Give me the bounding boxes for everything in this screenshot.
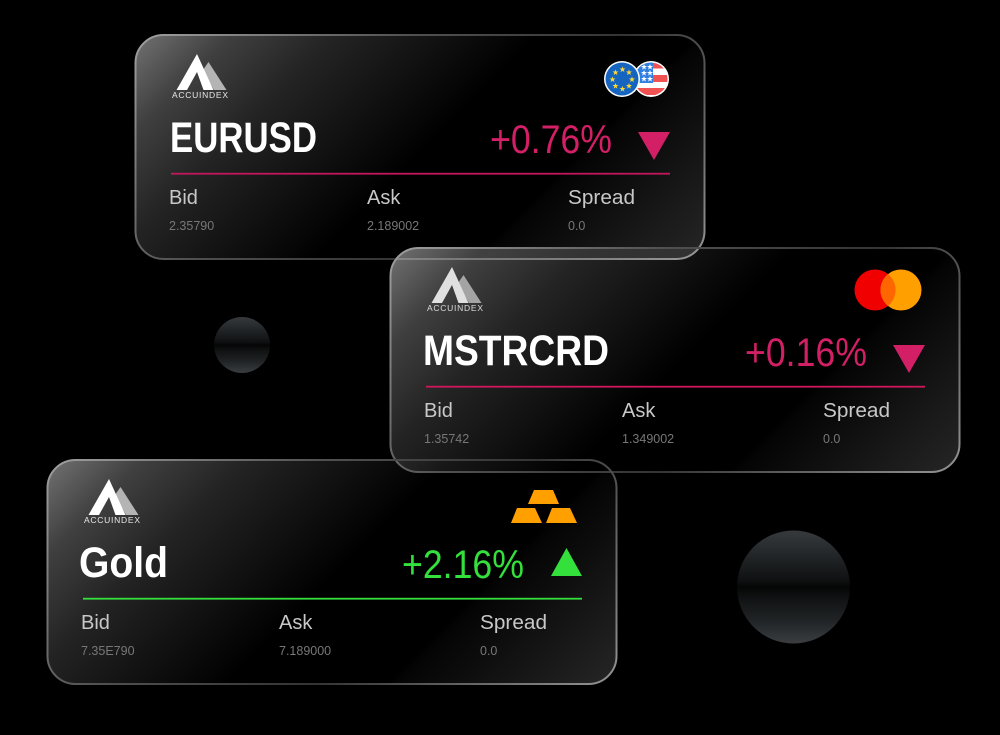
- labels and values: [81, 612, 547, 658]
- icon: EU and US flags: [604, 61, 669, 97]
- large decorative sphere: [737, 530, 850, 644]
- labels and values: 2.35790: [169, 219, 214, 233]
- labels and values: 0.0: [568, 219, 585, 233]
- small decorative sphere: [214, 317, 270, 373]
- logo: Accuindex: ACCUINDEX: [427, 303, 483, 313]
- labels and values: 7.189000: [279, 644, 331, 658]
- labels and values: [424, 400, 890, 446]
- change value: +0.16%: [745, 331, 867, 375]
- icon: gold bars: [511, 490, 577, 523]
- labels and values: 0.0: [480, 644, 497, 658]
- labels and values: 1.35742: [424, 432, 469, 446]
- labels and values: 7.35E790: [81, 644, 135, 658]
- logo: Accuindex: ACCUINDEX: [84, 515, 140, 525]
- labels and values: 1.349002: [622, 432, 674, 446]
- labels and values: Bid: [81, 612, 110, 634]
- logo: Accuindex: [427, 267, 483, 313]
- labels and values: Spread: [823, 400, 890, 422]
- logo: Accuindex: ACCUINDEX: [172, 90, 228, 100]
- change value: +0.76%: [490, 118, 612, 162]
- panel: MSTRCRD card: [390, 248, 960, 472]
- labels and values: Ask: [622, 400, 656, 422]
- labels and values: Bid: [169, 187, 198, 209]
- icon: Mastercard logo: [854, 270, 922, 310]
- panel: Gold card: [48, 460, 616, 684]
- change value: +2.16%: [402, 543, 524, 587]
- labels and values: [169, 187, 635, 233]
- panel: EURUSD card: [136, 35, 704, 259]
- labels and values: Bid: [424, 400, 453, 422]
- icon: up arrow: [551, 548, 582, 576]
- icon: down arrow: [638, 132, 670, 160]
- heading: MSTRCRD: MSTRCRD: [423, 327, 609, 375]
- heading: EURUSD: EURUSD: [170, 114, 317, 162]
- divider line: [83, 598, 582, 600]
- labels and values: 2.189002: [367, 219, 419, 233]
- icon: down arrow: [893, 345, 925, 373]
- divider line: [171, 173, 670, 175]
- divider line: [426, 386, 925, 388]
- labels and values: Ask: [279, 612, 313, 634]
- labels and values: Ask: [367, 187, 401, 209]
- labels and values: 0.0: [823, 432, 840, 446]
- heading: Gold: Gold: [79, 539, 168, 587]
- logo: Accuindex: [172, 54, 228, 100]
- labels and values: Spread: [568, 187, 635, 209]
- logo: Accuindex: [84, 479, 140, 525]
- labels and values: Spread: [480, 612, 547, 634]
